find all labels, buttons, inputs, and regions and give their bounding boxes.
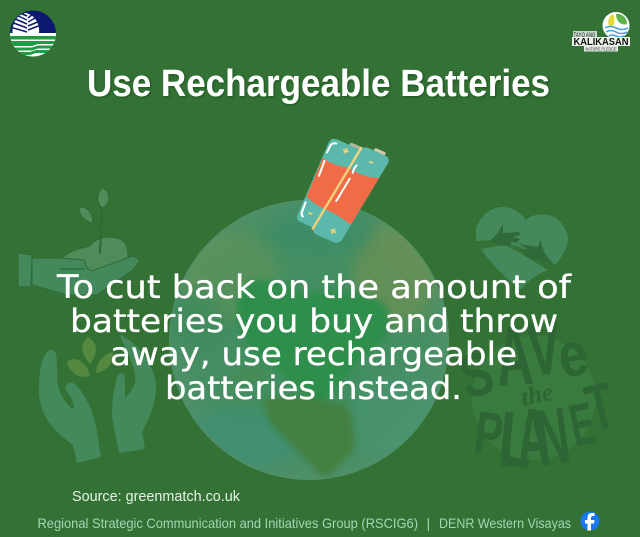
graphic: Save the Planet lettering: P	[470, 398, 507, 469]
right battery	[311, 143, 393, 245]
source credit: Source: greenmatch.co.uk	[72, 488, 240, 505]
title: Use Rechargeable Batteries	[87, 63, 550, 105]
body text: batteries you buy and throw	[70, 302, 558, 340]
graphic: Save the Planet lettering: T	[579, 368, 622, 446]
body text: To cut back on the amount of	[56, 268, 572, 306]
graphic: Save the Planet lettering: S	[452, 336, 500, 412]
graphic: Save the Planet lettering: E	[564, 390, 601, 460]
footer credit: |	[426, 515, 430, 531]
body text: away, use rechargeable	[110, 335, 517, 373]
icon: Tayo ang Kalikasan logo: NATURE PLEDGE	[586, 46, 616, 52]
icon: heart with reaching hands	[476, 207, 568, 290]
icon: rechargeable batteries	[282, 130, 393, 245]
icon: DENR logo	[10, 10, 56, 57]
footer credit: DENR Western Visayas	[439, 515, 571, 531]
icon: open hands with leaves	[39, 335, 156, 463]
icon: Tayo ang Kalikasan logo: TAYO ANG	[574, 32, 596, 39]
graphic: Save the Planet lettering	[452, 303, 622, 485]
icon: Facebook	[580, 512, 600, 530]
graphic: Save the Planet lettering: e	[552, 319, 593, 392]
graphic: Save the Planet lettering: N	[531, 390, 575, 483]
graphic: Save the Planet lettering: A	[493, 307, 536, 404]
graphic: Save the Planet lettering: the	[519, 379, 556, 412]
footer credit: Regional Strategic Communication and Initiatives Group (RSCIG6)	[38, 515, 418, 531]
icon: hand holding seedling	[18, 188, 140, 295]
icon: Tayo ang Kalikasan logo: KALIKASAN	[574, 37, 628, 48]
graphic: Save the Planet lettering: V	[523, 303, 565, 393]
graphic: Save the Planet lettering: A	[515, 392, 551, 485]
body text: batteries instead.	[165, 369, 462, 407]
graphic: Save the Planet lettering: L	[495, 396, 536, 485]
left battery	[285, 135, 362, 228]
strap	[312, 147, 362, 229]
icon: Tayo ang Kalikasan logo	[572, 12, 630, 52]
body text	[56, 268, 572, 407]
illustration: globe	[165, 200, 450, 480]
